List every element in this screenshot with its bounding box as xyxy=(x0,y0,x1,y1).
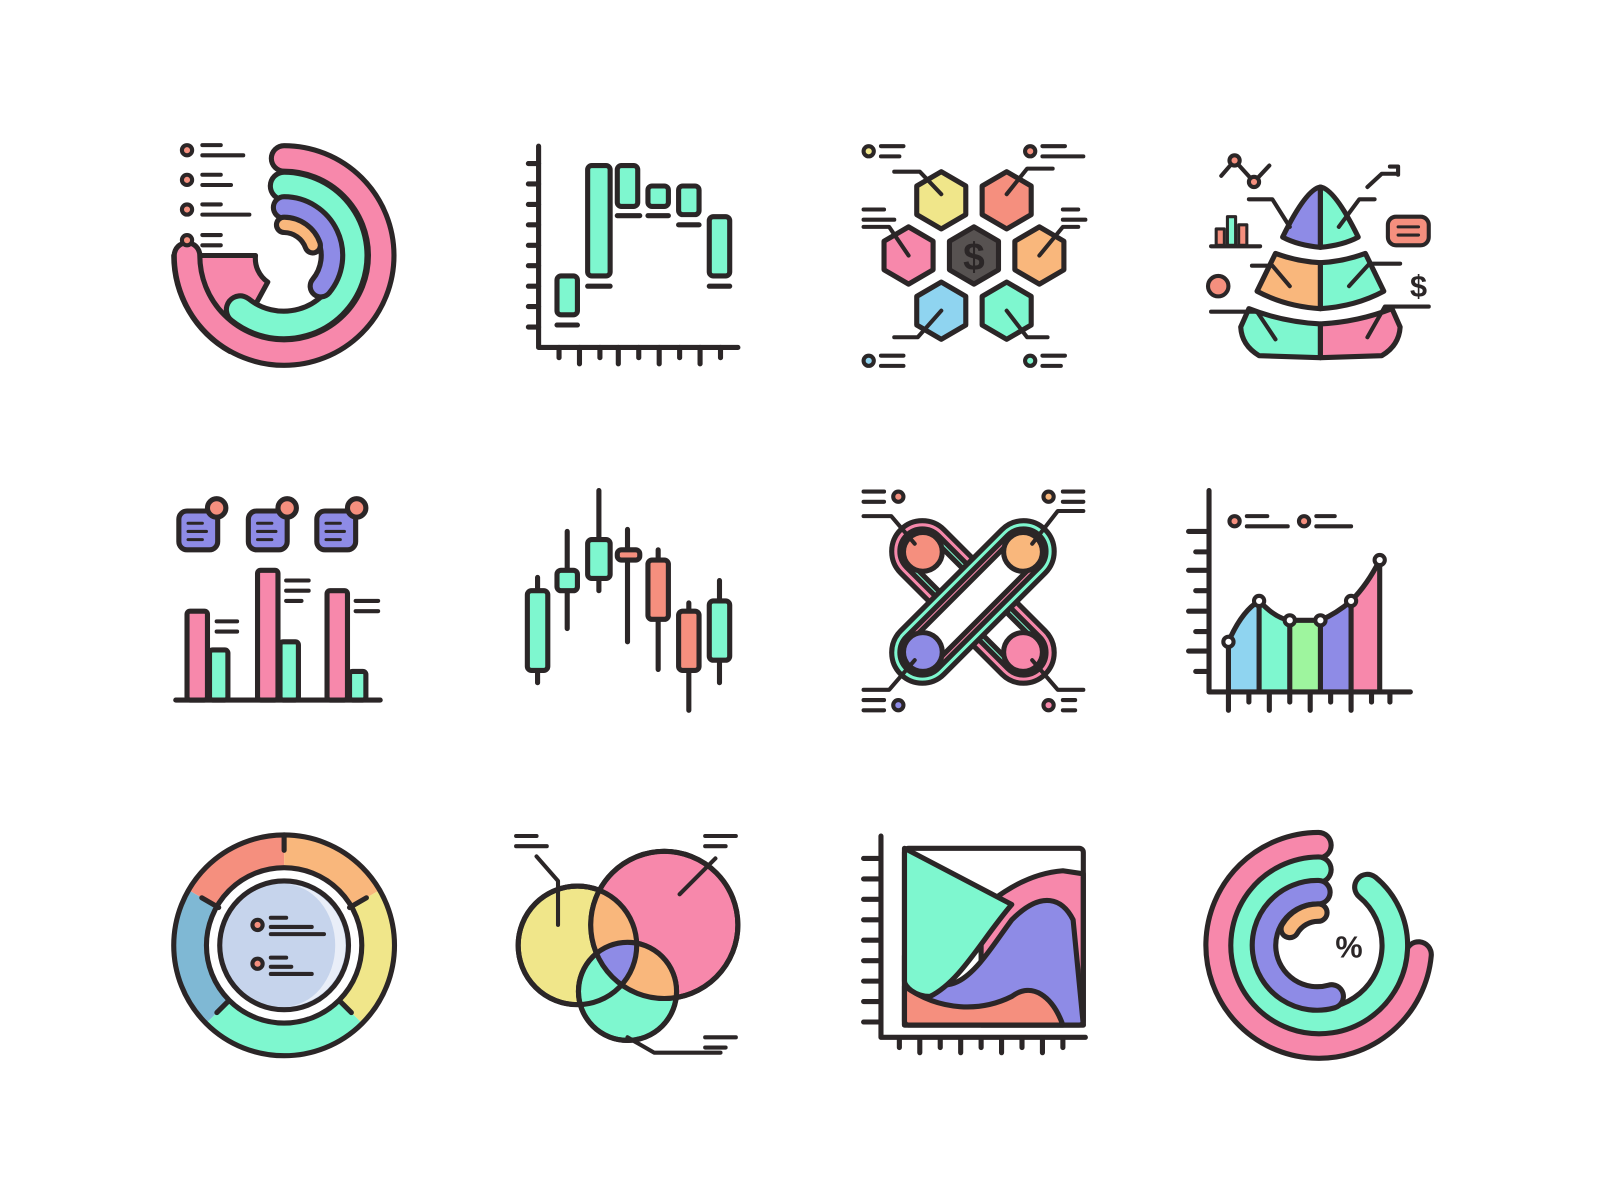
icon: radial progress percent: % xyxy=(1335,931,1363,965)
icon: segmented ring with gear xyxy=(174,835,394,1056)
icon: crossed capsules xyxy=(864,492,1083,710)
icon: radial progress percent xyxy=(1219,845,1419,1046)
icon: waterfall bar chart xyxy=(528,146,738,364)
icon: candlestick chart xyxy=(527,491,730,710)
icon: hexagon finance: $ xyxy=(963,236,985,279)
icon: hexagon finance xyxy=(864,146,1085,366)
icon: grouped bar chart with notes xyxy=(176,499,380,700)
icon: stacked area chart xyxy=(864,836,1085,1053)
icon: venn diagram xyxy=(516,836,738,1053)
icon: donut progress chart xyxy=(174,145,381,353)
icon: pyramid chart xyxy=(1208,155,1429,358)
icon: pyramid chart: $ xyxy=(1410,269,1427,303)
icon: area bar chart xyxy=(1189,491,1410,710)
